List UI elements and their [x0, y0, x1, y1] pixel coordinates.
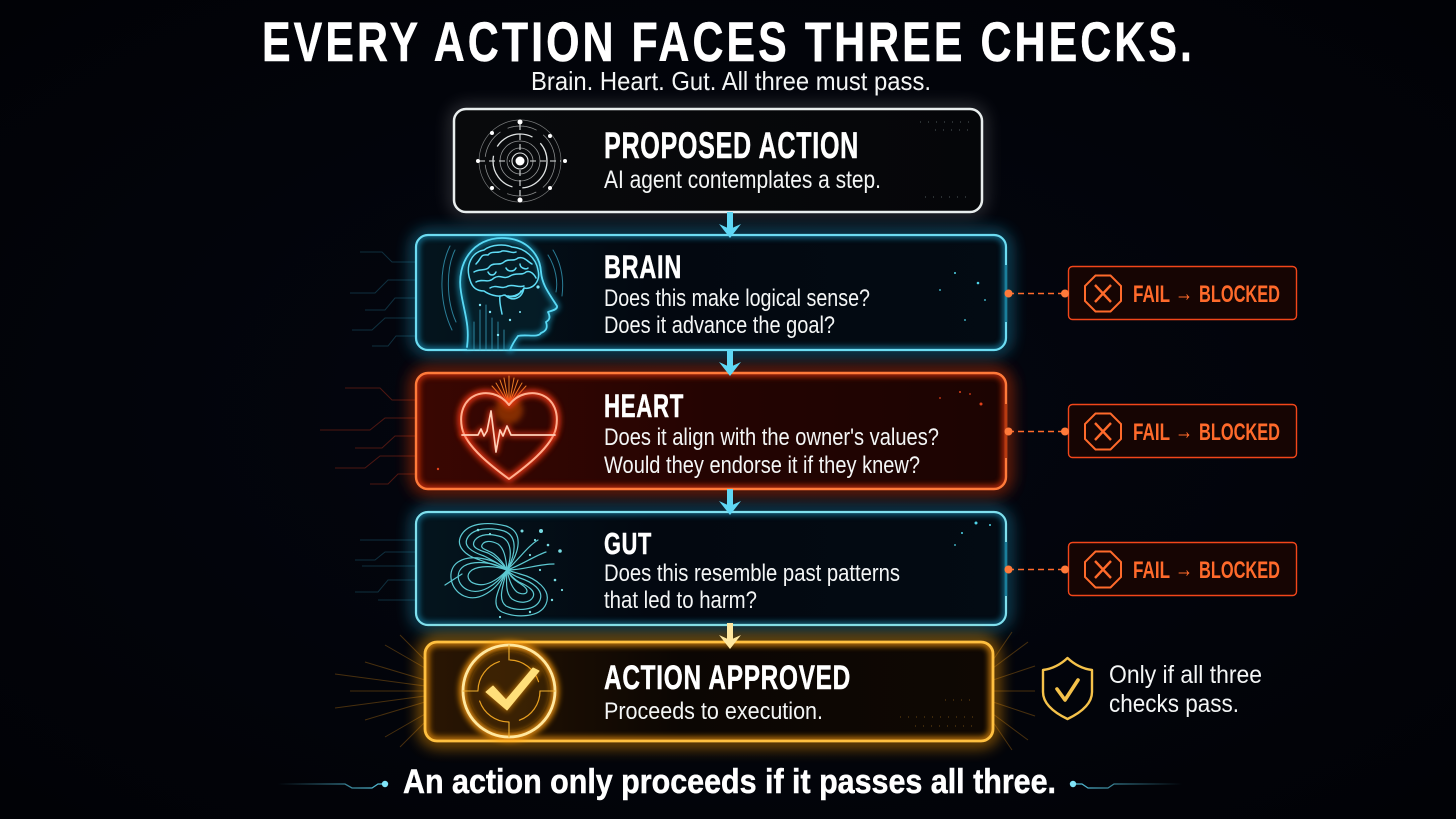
heading: HEART	[604, 388, 684, 424]
arrow: proposed to brain	[719, 212, 741, 238]
callout: gut fail: FAIL	[1133, 557, 1170, 584]
callout: brain fail: BLOCKED	[1199, 281, 1280, 308]
callout: heart fail: FAIL	[1133, 419, 1170, 446]
callout: brain fail: FAIL	[1133, 281, 1170, 308]
callout: gut fail: BLOCKED	[1199, 557, 1280, 584]
panel: proposed action	[454, 109, 982, 212]
description: Does this resemble past patterns	[604, 560, 900, 587]
note: only if all three checks pass: checks pass.	[1109, 690, 1239, 718]
panel: heart	[416, 373, 1006, 489]
footer statement: An action only proceeds if it passes all three.	[403, 763, 1056, 801]
note: only if all three checks pass	[1109, 661, 1262, 718]
description: Does it advance the goal?	[604, 312, 835, 339]
icon: check in glowing circle	[463, 645, 555, 737]
circuit traces: left and right of the panels	[320, 252, 1035, 750]
description	[604, 560, 900, 614]
icon: gut swirl network	[445, 524, 563, 618]
heading: PROPOSED ACTION	[604, 125, 859, 166]
description: Would they endorse it if they knew?	[604, 452, 920, 479]
description	[604, 424, 939, 479]
panel: action approved	[425, 642, 993, 741]
heading: GUT	[604, 526, 652, 561]
description: AI agent contemplates a step.	[604, 166, 881, 194]
note: only if all three checks pass: Only if all three	[1109, 661, 1262, 689]
callout: gut fail: →	[1175, 556, 1193, 583]
heading: ACTION APPROVED	[604, 659, 851, 697]
callout: heart fail: →	[1175, 418, 1193, 445]
arrow: heart to gut	[719, 489, 741, 515]
callout: heart fail	[1004, 404, 1296, 458]
footer decoration left	[278, 781, 388, 788]
callout: brain fail: →	[1175, 280, 1193, 307]
description	[604, 285, 870, 339]
description: Proceeds to execution.	[604, 698, 823, 725]
footer decoration right	[1070, 781, 1182, 788]
callout: heart fail: BLOCKED	[1199, 419, 1280, 446]
title: EVERY ACTION FACES THREE CHECKS.	[262, 10, 1195, 73]
icon: target rings	[476, 120, 567, 202]
heading: BRAIN	[604, 249, 682, 285]
panel: gut	[416, 512, 1006, 625]
panel: brain	[416, 235, 1006, 350]
subtitle: Brain. Heart. Gut. All three must pass.	[531, 66, 931, 96]
arrow: brain to heart	[719, 350, 741, 376]
icon: shield with check	[1043, 658, 1092, 719]
description: Does it align with the owner's values?	[604, 424, 939, 451]
arrow: gut to approved	[719, 623, 741, 649]
callout: gut fail	[1004, 542, 1296, 596]
icon: brain in head profile	[442, 238, 563, 350]
description: that led to harm?	[604, 587, 757, 614]
infographic canvas	[264, 22, 1298, 800]
callout: brain fail	[1004, 266, 1296, 320]
icon: heart with pulse line	[461, 376, 557, 479]
description: Does this make logical sense?	[604, 285, 870, 312]
